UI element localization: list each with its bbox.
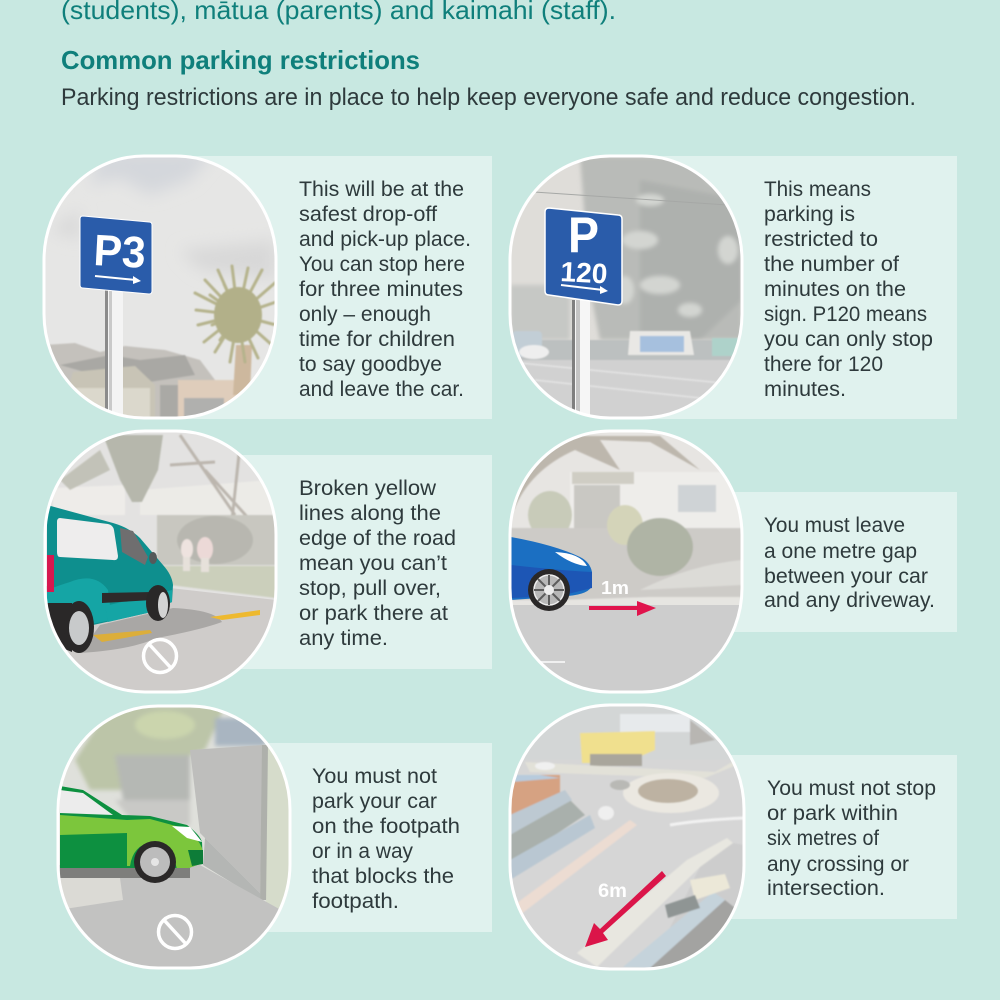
icon: P3 parking sign (80, 216, 152, 294)
panel: footpath (58, 706, 492, 968)
text: P3 description: only – enough (299, 303, 431, 326)
text: yellow lines description: Broken yellow (299, 477, 437, 500)
text: footpath description (312, 765, 460, 913)
text: crossing distance description: any crossing or (767, 853, 909, 876)
illustration: green car on footpath (58, 706, 290, 968)
label: 1m with arrow (589, 578, 656, 616)
green car (60, 786, 203, 870)
text: one metre gap description: You must leave (764, 514, 905, 537)
text: one metre gap description: and any driveway. (764, 589, 935, 612)
text: yellow lines description: or park there at (299, 602, 448, 625)
van body (47, 505, 173, 630)
text: yellow lines description: edge of the road (299, 527, 456, 550)
text: P3 description: You can stop here (299, 253, 465, 276)
text: P120 description: you can only stop (764, 328, 933, 351)
panel: broken yellow lines (45, 431, 492, 692)
sign pole (108, 291, 123, 414)
icon: P120 parking sign (545, 207, 622, 305)
illustration: blue car by driveway (510, 431, 742, 692)
icon: no parking on footpath (158, 916, 192, 948)
text: P3 description: for three minutes (299, 278, 463, 301)
text: one metre gap description (764, 514, 935, 612)
illustration: P3 sign scene (44, 150, 276, 418)
text: P120 description: minutes. (764, 378, 846, 401)
subheading text: Parking restrictions are in place to help keep everyone safe and reduce congestion. (61, 84, 916, 111)
label: 1m with arrow: 1m (601, 578, 629, 598)
text: footpath description: on the footpath (312, 815, 460, 838)
heading: common parking restrictions: Common parking restrictions (61, 45, 420, 75)
text: P120 description: This means (764, 178, 871, 201)
text: one metre gap description: between your car (764, 565, 928, 588)
text: P120 description: restricted to (764, 228, 878, 251)
text: crossing distance description: intersection. (767, 877, 885, 900)
panel: P120 sign (510, 156, 957, 419)
text: footpath description: footpath. (312, 890, 399, 913)
text: P3 description: safest drop-off (299, 203, 437, 226)
text: P120 description: there for 120 (764, 353, 883, 376)
label: 6m with arrow: 6m (598, 881, 627, 902)
text: crossing distance description: or park within (767, 802, 898, 825)
blue car (511, 537, 592, 600)
icon: P120 parking sign: 120 (560, 256, 608, 289)
illustration: aerial intersection (510, 705, 744, 969)
text: crossing distance description (767, 777, 936, 900)
text: yellow lines description: stop, pull over, (299, 577, 441, 600)
text: P120 description: the number of (764, 253, 899, 276)
text: crossing distance description: six metres of (767, 827, 879, 850)
text: P3 description: time for children (299, 328, 455, 351)
illustration: van on broken yellow lines (45, 431, 276, 692)
text: P3 description: and leave the car. (299, 378, 464, 401)
text: yellow lines description: lines along the (299, 502, 441, 525)
text: P120 description: sign. P120 means (764, 303, 927, 326)
text: yellow lines description (299, 477, 456, 650)
text: P3 description: to say goodbye (299, 353, 442, 376)
panel: P3 sign (44, 150, 492, 419)
text: one metre gap description: a one metre gap (764, 540, 917, 563)
label: 6m with arrow (585, 871, 666, 947)
text: yellow lines description: mean you can’t (299, 552, 447, 575)
broken yellow road lines (93, 630, 152, 642)
text: P3 description (299, 178, 471, 401)
text: crossing distance description: You must not stop (767, 777, 936, 800)
text: footpath description: that blocks the (312, 865, 454, 888)
panel: crossing distance (510, 705, 957, 969)
text: P120 description (764, 178, 933, 401)
text: footpath description: park your car (312, 790, 437, 813)
icon: P120 parking sign: P (568, 207, 599, 263)
icon: no stopping (144, 640, 176, 672)
text: P3 description: and pick-up place. (299, 228, 471, 251)
text: footpath description: or in a way (312, 840, 413, 863)
text: yellow lines description: any time. (299, 627, 388, 650)
text: P3 description: This will be at the (299, 178, 464, 201)
text: P120 description: minutes on the (764, 278, 906, 301)
panel: one metre gap (510, 431, 957, 692)
sign pole (575, 300, 590, 414)
illustration: P120 sign scene (510, 156, 742, 418)
icon: P3 parking sign: P3 (92, 226, 147, 278)
text: footpath description: You must not (312, 765, 437, 788)
text: P120 description: parking is (764, 203, 855, 226)
